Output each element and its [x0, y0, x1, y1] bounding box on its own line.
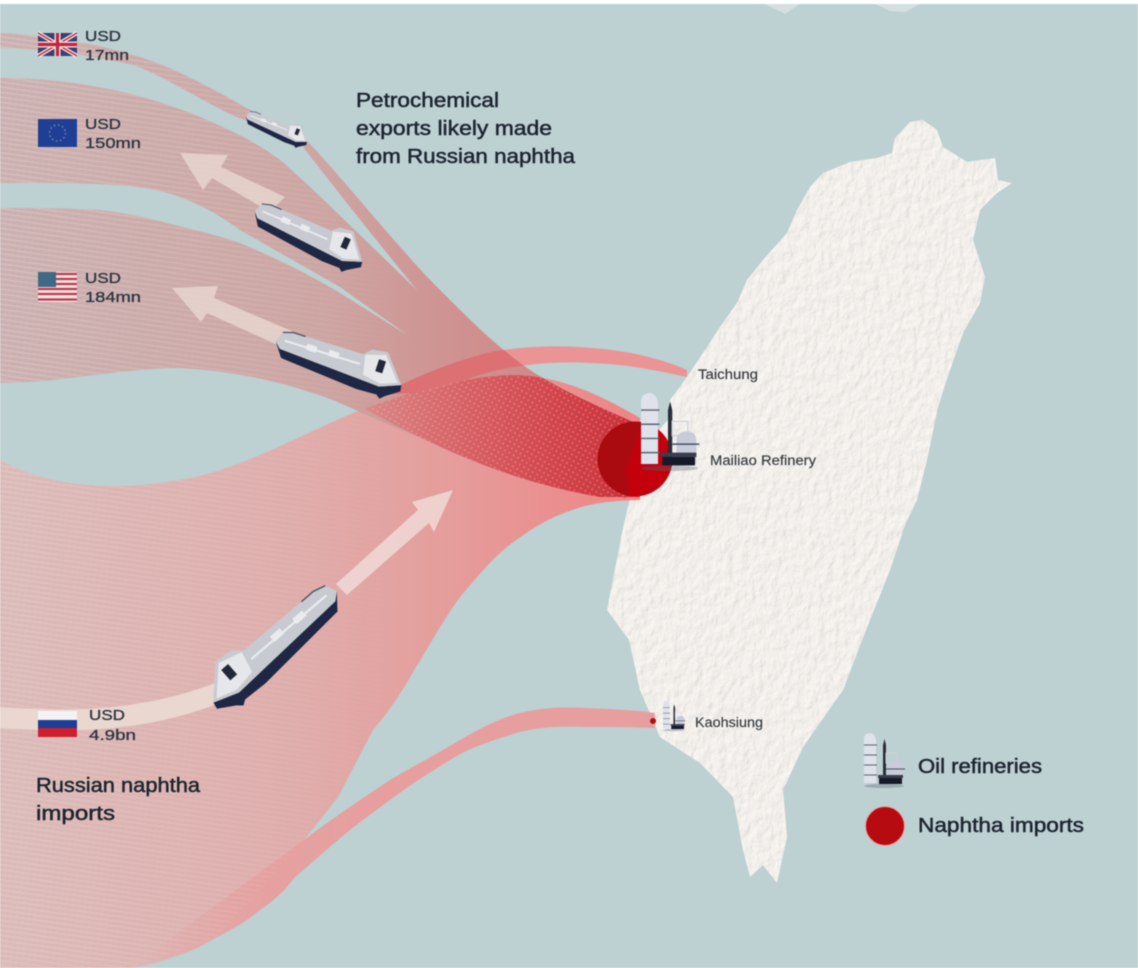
value: US: USD: [85, 270, 121, 287]
texture: import lines: [0, 400, 440, 968]
heading: exports: Petrochemical: [356, 90, 499, 112]
flow band: to Taichung: [380, 346, 687, 395]
label: Kaohsiung: Kaohsiung: [695, 715, 763, 730]
heading: exports: from Russian naphtha: [356, 146, 576, 168]
heading: exports: [356, 90, 576, 168]
marker: Mailiao naphtha imports: [598, 422, 672, 496]
label: Mailiao Refinery: Mailiao Refinery: [710, 453, 816, 468]
flow band: main import fan: [0, 375, 640, 968]
flag: European Union: [38, 119, 77, 147]
legend label: oil refineries: Oil refineries: [918, 756, 1042, 778]
flow: Russian naphtha imports: [0, 346, 687, 968]
map: Taiwan: [590, 105, 1025, 895]
flow trail: Russian ship route: [0, 682, 222, 730]
heading: imports: Russian naphtha: [36, 775, 201, 797]
ship: US route: [269, 318, 411, 404]
value: UK: [85, 28, 129, 64]
value: EU: [85, 116, 141, 152]
texture: export lines: [0, 35, 176, 382]
value: UK: USD: [85, 28, 121, 45]
heading: imports: imports: [36, 803, 115, 825]
flow band: United States: [0, 208, 640, 497]
heading: imports: [36, 775, 201, 825]
value: EU: 150mn: [85, 135, 141, 152]
value: EU: USD: [85, 116, 121, 133]
heading: exports: exports likely made: [356, 118, 552, 140]
value: UK: 17mn: [85, 47, 129, 64]
flow band: to Kaohsiung: [130, 708, 655, 968]
top edge: [765, 4, 920, 14]
flow: petrochemical exports: [0, 32, 542, 435]
value: Russia: 4.9bn: [89, 727, 136, 744]
value: Russia: USD: [89, 707, 125, 724]
flag: Russia: [38, 711, 77, 737]
flow overlap: exports made from imports: [366, 350, 640, 498]
icon: Mailiao refinery: [641, 393, 699, 471]
arrow: Russian imports direction: [336, 490, 453, 595]
icon: Kaohsiung refinery: [663, 701, 686, 731]
ship: UK route: [242, 104, 312, 151]
ship: Russian route: [193, 571, 353, 720]
value: US: 184mn: [85, 289, 141, 306]
arrow: US exports direction: [172, 286, 292, 347]
flow band: European Union: [0, 78, 640, 480]
legend label: naphtha imports: Naphtha imports: [918, 815, 1084, 837]
flow band: United Kingdom: [0, 33, 640, 440]
arrow: EU exports direction: [180, 153, 285, 212]
legend icon: naphtha imports: [866, 806, 904, 846]
ship: EU route: [246, 191, 373, 278]
value: Russia: [89, 707, 136, 744]
legend: [864, 733, 1084, 846]
legend icon: oil refineries: [864, 733, 905, 788]
flag: United Kingdom: [38, 33, 77, 56]
label: Taichung: Taichung: [698, 367, 758, 382]
marker: Kaohsiung naphtha imports: [650, 718, 656, 724]
value: US: [85, 270, 141, 306]
flag: United States: [38, 272, 77, 302]
